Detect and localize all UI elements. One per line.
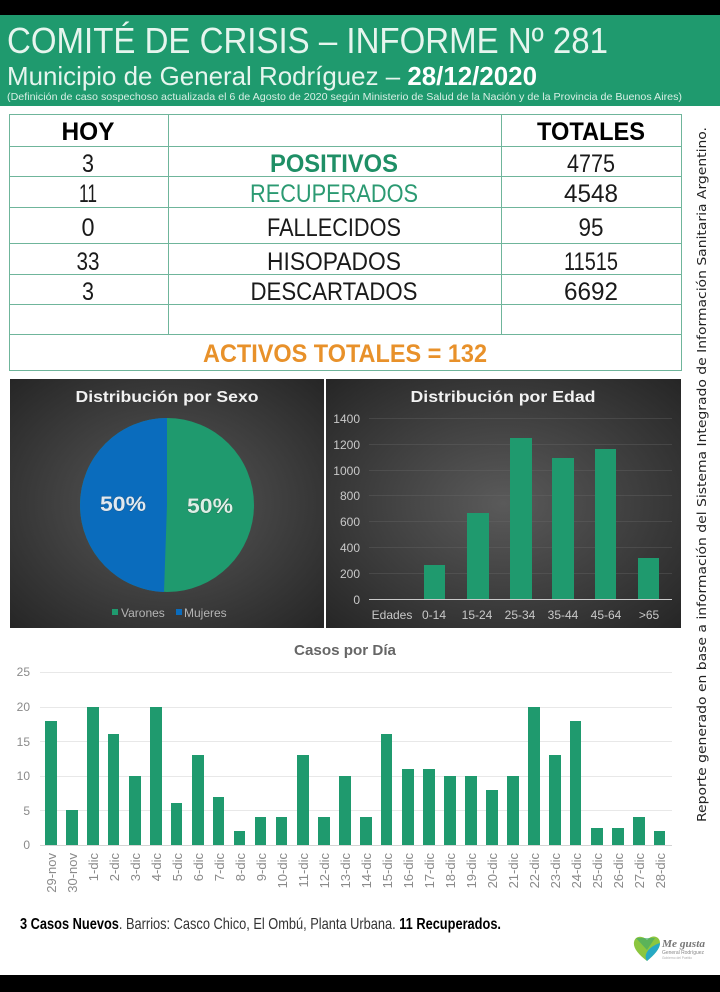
top black band (0, 0, 720, 15)
row: positivos: POSITIVOS (270, 150, 398, 178)
row: descartados (82, 278, 618, 306)
pie chart: 50% (187, 495, 233, 518)
daily bar chart: 7-dic (212, 853, 227, 881)
row: descartados: DESCARTADOS (250, 278, 418, 306)
pie chart: 50% (100, 493, 146, 516)
daily bar chart: 16-dic (401, 853, 416, 888)
bar chart: Edades (372, 608, 412, 622)
row: fallecidos: 95 (578, 214, 604, 242)
panel: distribution by sex (10, 379, 324, 628)
daily bar chart: 8-dic (233, 853, 248, 881)
daily bar chart: 3-dic (128, 853, 143, 881)
daily bar chart: 27-dic (632, 853, 647, 888)
panel: distribution by age (326, 379, 681, 628)
logo: Me gusta: General Rodríguez (662, 950, 704, 956)
daily bar chart: 18-dic (443, 853, 458, 888)
case definition note: (Definición de caso sospechoso actualizada el 6 de Agosto de 2020 según Ministerio de Salud de la Nación y de la Provincia de Buenos Aires) (7, 91, 682, 103)
daily bar chart: 20-dic (485, 853, 500, 888)
bar chart: 25-34 (505, 608, 536, 622)
row: positivos (82, 150, 615, 178)
daily bar chart: 24-dic (569, 853, 584, 888)
bar chart: 600 (340, 515, 360, 529)
pie chart (80, 418, 254, 592)
table header: HOY (62, 118, 115, 146)
bar chart: 200 (340, 567, 360, 581)
bar chart (333, 412, 672, 622)
title: COMITÉ DE CRISIS – INFORME Nº 281 (7, 20, 608, 61)
row: fallecidos: FALLECIDOS (267, 214, 401, 242)
row: positivos: 3 (82, 150, 94, 178)
daily bar chart: 15 (17, 735, 30, 749)
row: hisopados: HISOPADOS (267, 248, 401, 276)
bar chart: >65 (639, 608, 660, 622)
daily bar chart: 5 (23, 804, 30, 818)
bar chart: 1000 (333, 464, 360, 478)
daily bar chart: 19-dic (464, 853, 479, 888)
row: recuperados: 11 (79, 180, 97, 208)
daily bar chart: 11-dic (296, 853, 311, 887)
row: hisopados: 11515 (564, 248, 618, 276)
daily bar chart: 5-dic (170, 853, 185, 881)
logo: Me gusta (634, 936, 706, 961)
row: descartados: 6692 (564, 278, 618, 306)
daily bar chart: 1-dic (86, 853, 101, 881)
table header (62, 118, 645, 146)
row: recuperados (79, 180, 618, 208)
subtitle with date: Municipio de General Rodríguez – 28/12/2020 (7, 61, 537, 91)
daily bar chart: 29-nov (44, 853, 59, 893)
daily bar chart: 26-dic (611, 853, 626, 888)
daily bar chart: 21-dic (506, 853, 521, 888)
row: descartados: 3 (82, 278, 94, 306)
icon: heart (634, 936, 660, 961)
row: fallecidos: 0 (82, 214, 94, 242)
legend: Varones (121, 606, 165, 620)
daily summary note: 3 Casos Nuevos. Barrios: Casco Chico, El Ombú, Planta Urbana. 11 Recuperados. (20, 916, 501, 933)
daily bar chart: 4-dic (149, 853, 164, 881)
heading: Casos por Día (294, 642, 397, 659)
bar chart: 1400 (333, 412, 360, 426)
bar chart: 45-64 (591, 608, 622, 622)
daily bar chart: 9-dic (254, 853, 269, 881)
daily bar chart: 0 (23, 838, 30, 852)
row: hisopados: 33 (76, 248, 100, 276)
row: hisopados (76, 248, 618, 276)
logo: Me gusta: Me gusta (661, 938, 706, 950)
summary table (10, 114, 682, 370)
daily bar chart: 2-dic (107, 853, 122, 881)
bar chart: 400 (340, 541, 360, 555)
daily bar chart: 30-nov (65, 853, 80, 893)
daily bar chart: 12-dic (317, 853, 332, 888)
daily bar chart: 28-dic (653, 853, 668, 888)
daily bar chart: 13-dic (338, 853, 353, 888)
bar chart: 35-44 (548, 608, 579, 622)
heading: Distribución por Sexo (76, 389, 259, 406)
daily bar chart: 23-dic (548, 853, 563, 888)
side note: data source: Reporte generado en base a información del Sistema Integrado de Información Sanitaria Argentino. (694, 127, 709, 822)
daily bar chart: 10 (17, 769, 30, 783)
daily bar chart (17, 665, 672, 893)
bar chart: 1200 (333, 438, 360, 452)
bar chart: 0 (353, 593, 360, 607)
daily bar chart: 6-dic (191, 853, 206, 881)
row: recuperados: RECUPERADOS (250, 180, 418, 208)
bottom black band (0, 975, 720, 992)
legend: Mujeres (184, 606, 227, 620)
daily bar chart: 10-dic (275, 853, 290, 888)
table header: TOTALES (537, 118, 645, 146)
daily bar chart: 20 (17, 700, 30, 714)
daily bar chart: 25 (17, 665, 30, 679)
heading: Distribución por Edad (410, 389, 596, 406)
legend (112, 606, 227, 620)
daily bar chart: 22-dic (527, 853, 542, 888)
header banner (0, 15, 720, 106)
daily bar chart: 17-dic (422, 853, 437, 888)
daily bar chart: 15-dic (380, 853, 395, 888)
row: positivos: 4775 (567, 150, 615, 178)
panel: cases per day (17, 642, 672, 893)
daily bar chart: 14-dic (359, 853, 374, 888)
active total: ACTIVOS TOTALES = 132 (203, 340, 487, 368)
row: fallecidos (82, 214, 604, 242)
bar chart: 15-24 (462, 608, 493, 622)
bar chart: 0-14 (422, 608, 446, 622)
row: recuperados: 4548 (564, 180, 618, 208)
daily bar chart: 25-dic (590, 853, 605, 888)
logo: Me gusta: Gobierno del Pueblo (662, 956, 692, 960)
bar chart: 800 (340, 489, 360, 503)
